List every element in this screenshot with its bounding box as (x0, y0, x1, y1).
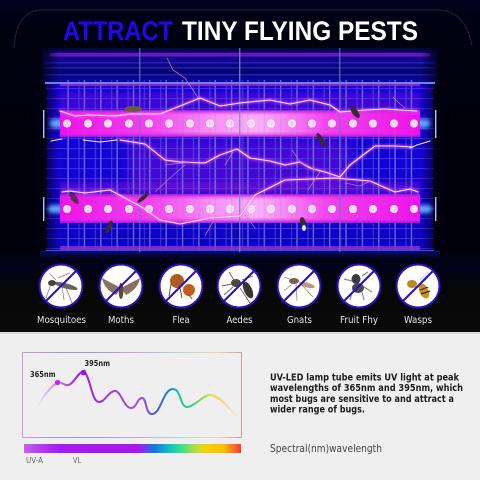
icon: wasps (396, 264, 440, 308)
pest labels: Aedes (226, 315, 252, 326)
pest labels: Fruit Fhy (340, 315, 378, 326)
title words: tiny flying pests: TINY FLYING PESTS (182, 16, 418, 46)
spectrum colour bar (24, 444, 241, 453)
label UV-A: UV-A (26, 456, 44, 465)
mesh edge fade left (36, 48, 60, 253)
insects on mesh (68, 105, 361, 234)
description text: wider range of bugs. (270, 404, 365, 416)
mesh body (47, 83, 433, 251)
icon: gnats (278, 264, 320, 308)
panel: spectrum section (0, 332, 480, 480)
pest labels: Moths (108, 315, 134, 326)
chart: spectral curve (22, 352, 242, 438)
axis caption: Spectral(nm)wavelength (270, 443, 382, 455)
icon: moths (100, 264, 142, 308)
title word: attract: ATTRACT (63, 16, 173, 46)
pest labels: Mosquitoes (37, 315, 86, 326)
arc glow (60, 98, 418, 224)
icon: mosquitoes (40, 264, 82, 308)
peak marker 365nm (55, 380, 60, 385)
mesh edge fade right (420, 48, 444, 253)
description text (270, 372, 463, 416)
panel: lamp photo background (0, 0, 480, 334)
upper mesh band (42, 48, 438, 83)
pest labels (37, 315, 432, 326)
title (63, 16, 418, 46)
pest labels: Wasps (404, 315, 432, 326)
lower UV tube (48, 194, 432, 223)
pest labels: Flea (172, 315, 190, 326)
label VL: VL (73, 456, 82, 465)
description text: most bugs are sensitive to and attract a (270, 394, 454, 405)
arc branches (155, 58, 405, 236)
icon: flea (160, 264, 202, 308)
lamp housing outline (14, 10, 472, 48)
peak marker 395nm (81, 370, 86, 375)
arc core (51, 98, 430, 224)
metal grid (46, 80, 434, 252)
upper UV tube (50, 110, 430, 137)
icon: fruit fly (338, 264, 380, 308)
label 395nm: 395nm (84, 359, 110, 368)
panel: pest icons row (37, 264, 440, 326)
label 365nm: 365nm (30, 370, 56, 379)
lower glow fade (40, 251, 440, 262)
pest labels: Gnats (287, 315, 312, 326)
grid posts and tube clips (43, 48, 436, 252)
icon: aedes (218, 264, 260, 308)
lightning arcs (51, 58, 430, 236)
